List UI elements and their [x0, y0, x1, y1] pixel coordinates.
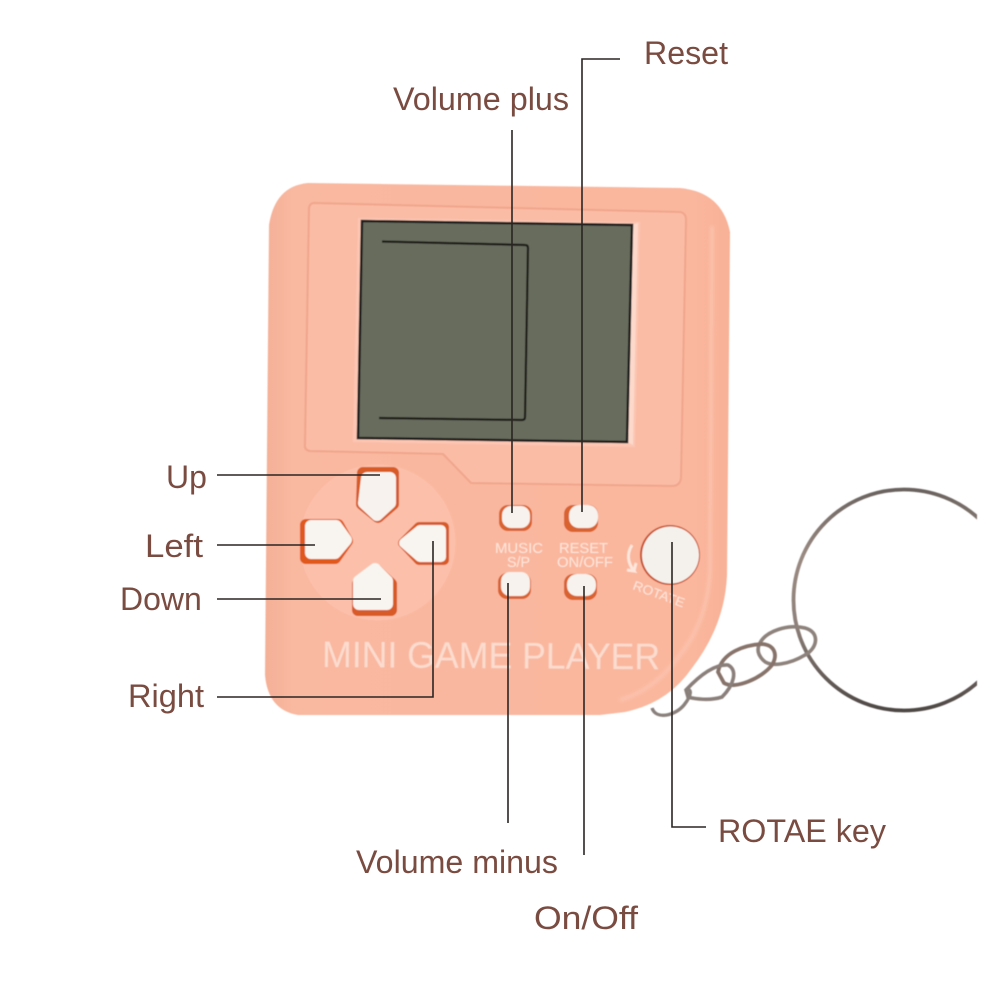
small button: music	[499, 505, 532, 531]
down button	[358, 569, 391, 610]
annotation: volume plus: Volume plus	[393, 81, 569, 117]
rotate button	[640, 525, 700, 585]
annotation: down: Down	[120, 581, 202, 617]
screen frame line	[379, 242, 528, 420]
annotation: up: Up	[166, 459, 207, 495]
right button	[403, 527, 444, 560]
annotation: reset	[582, 35, 728, 512]
brand text: MINI GAME PLAYER	[322, 634, 660, 677]
body shell	[265, 183, 730, 715]
icon: rotate arrow	[627, 545, 636, 571]
up button	[362, 473, 393, 517]
shell inner ridge	[620, 226, 712, 700]
icon: keyring and chain	[652, 490, 1002, 715]
screen bevel	[353, 218, 640, 447]
chain link 2	[718, 644, 775, 685]
annotation: reset: Reset	[644, 35, 728, 71]
annotation: rotae key	[672, 542, 886, 849]
key ring	[794, 490, 1002, 710]
chain link 3	[686, 665, 734, 699]
annotation: right: Right	[128, 678, 204, 714]
button caption: rotate: ROTATE	[631, 578, 687, 610]
small button: reset	[564, 505, 598, 532]
button caption: reset: RESET	[559, 540, 608, 557]
button caption: music: MUSIC	[495, 540, 543, 557]
screen highlight	[627, 223, 638, 445]
panel: game console body	[265, 183, 730, 715]
chain link 4	[652, 690, 690, 715]
chain link 1	[758, 627, 816, 664]
left button	[306, 525, 347, 558]
screen	[358, 221, 632, 442]
bezel	[305, 203, 686, 486]
annotation: volume minus: Volume minus	[356, 844, 558, 880]
d-pad circle	[300, 464, 456, 620]
annotation: right	[128, 541, 433, 714]
annotation: left: Left	[145, 528, 203, 564]
annotation: on/off: On/Off	[534, 900, 638, 936]
button caption: on/off: ON/OFF	[557, 554, 613, 571]
button caption: s/p: S/P	[507, 554, 530, 571]
small button: volume minus	[498, 572, 531, 599]
small button: on/off	[564, 574, 597, 600]
annotation: rotae key: ROTAE key	[718, 813, 886, 849]
